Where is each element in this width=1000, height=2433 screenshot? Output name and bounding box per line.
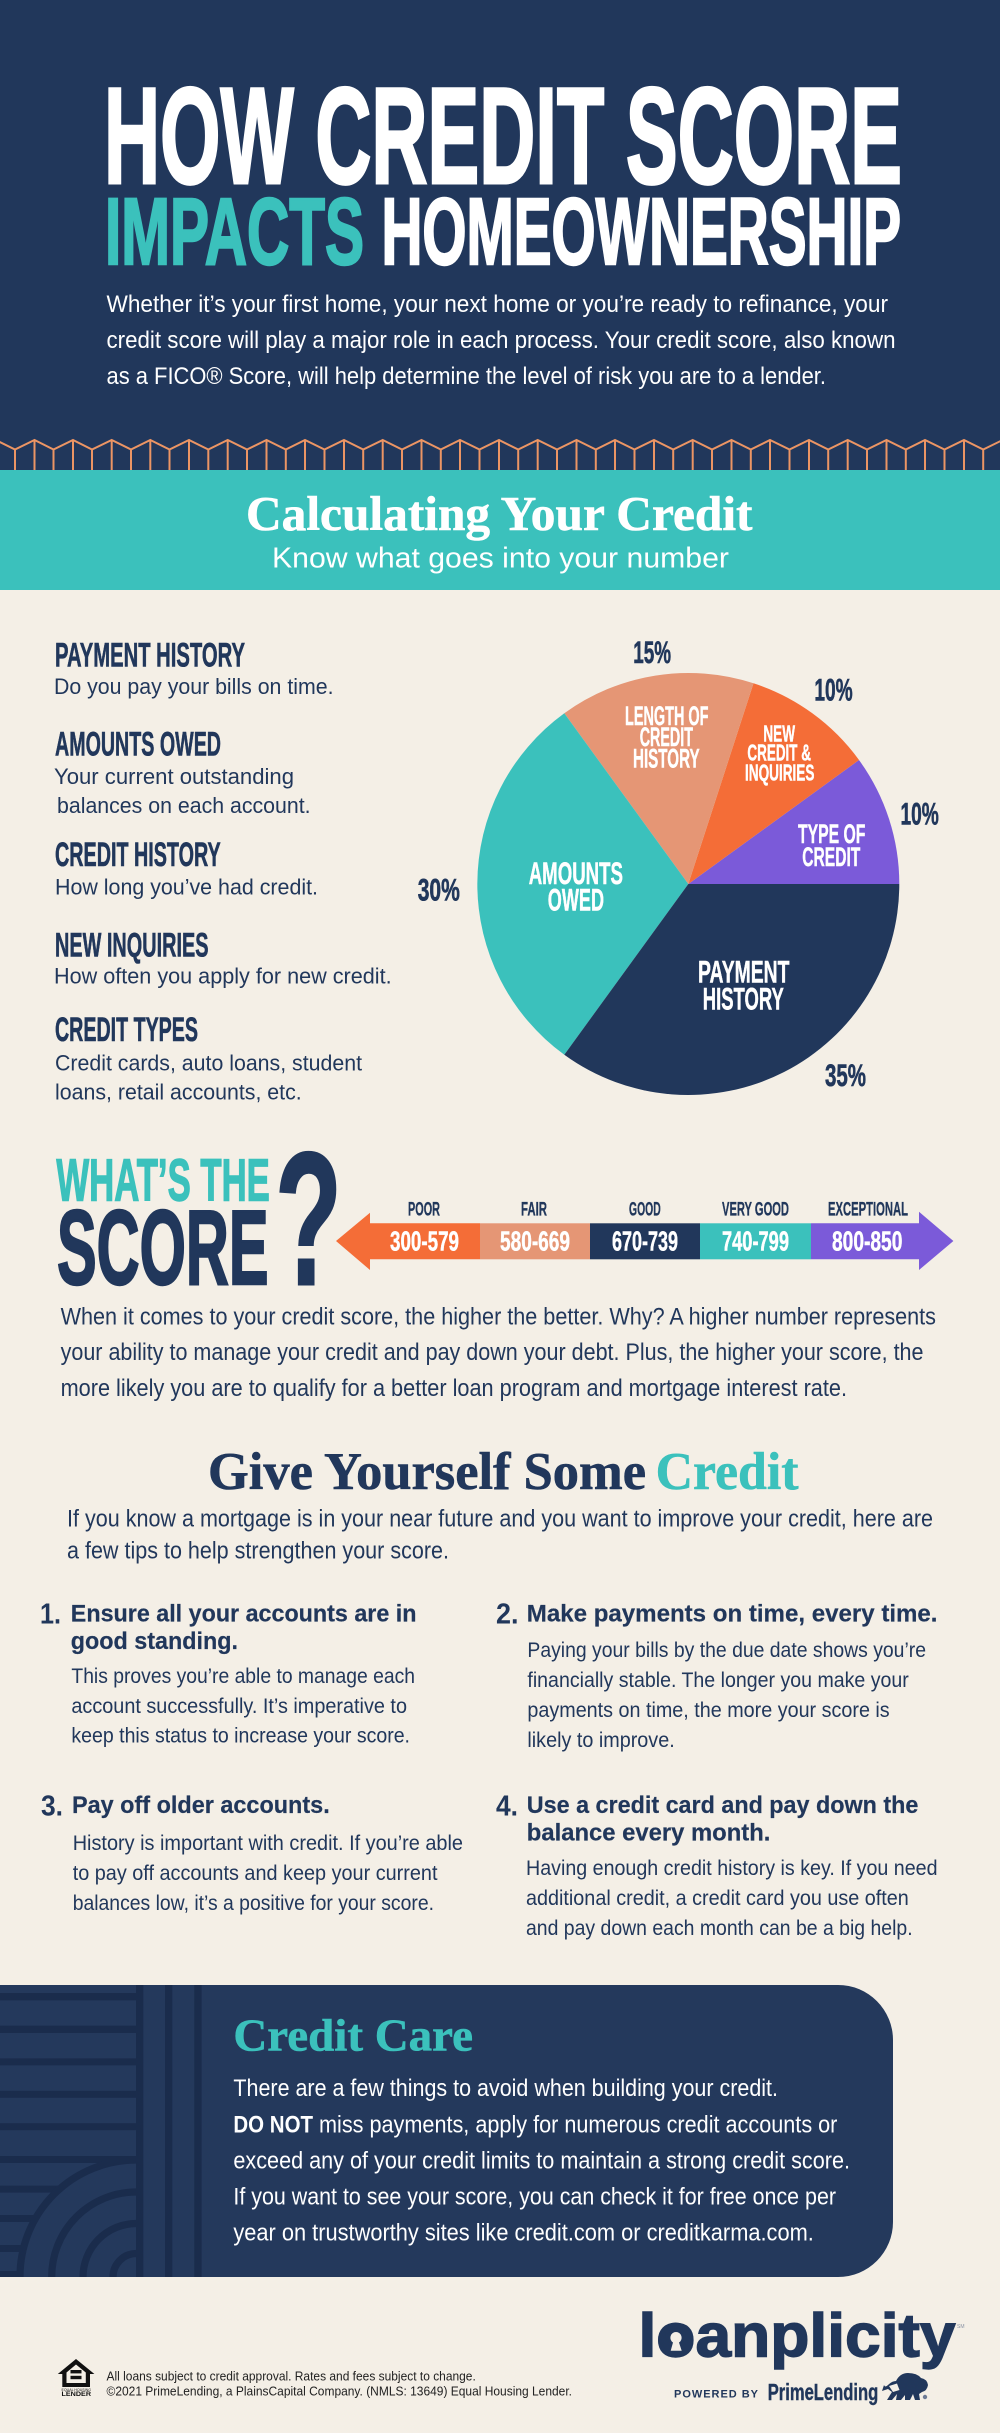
intro text: Whether it’s your first home, your next home or you’re ready to refinance, your — [106, 291, 888, 318]
logo: loanplicity powered by primelending: POWERED BY — [674, 2389, 759, 2401]
factor: credit types: loans, retail accounts, etc. — [55, 1080, 302, 1104]
pie labels: TYPE OF — [798, 819, 865, 849]
heading: what's the score — [56, 1114, 342, 1326]
factor: payment history: PAYMENT HISTORY — [55, 637, 245, 675]
tip 1: keep this status to increase your score. — [71, 1725, 410, 1748]
factor: credit types: Credit cards, auto loans, student — [55, 1051, 362, 1076]
tip 1: Ensure all your accounts are in — [71, 1600, 417, 1627]
logo: loanplicity powered by primelending: PrimeLending — [768, 2379, 878, 2405]
tip 4: 4. — [496, 1790, 518, 1822]
factor: credit types — [55, 1011, 362, 1104]
pie percentages — [418, 634, 939, 1093]
segment: poor — [336, 1200, 480, 1270]
credit care text: DO NOT — [233, 2111, 313, 2138]
tip 1: good standing. — [71, 1628, 238, 1655]
tip 3: Pay off older accounts. — [72, 1792, 330, 1819]
tip 2: financially stable. The longer you make your — [527, 1669, 909, 1692]
factor: amounts owed — [54, 725, 311, 818]
heading: give yourself some credit: Give Yourself Some — [208, 1443, 646, 1501]
segment: very good: 740-799 — [722, 1226, 789, 1257]
factor: amounts owed: balances on each account. — [57, 793, 311, 818]
pie labels: CREDIT — [640, 722, 693, 752]
tip 2: 2. — [496, 1598, 518, 1630]
icon: bison — [882, 2373, 928, 2400]
title — [104, 60, 902, 285]
slice: type of credit — [688, 760, 899, 884]
tip 3: History is important with credit. If you’re able — [73, 1832, 463, 1855]
pie percentages: 10% — [900, 796, 939, 832]
segment: exceptional: 800-850 — [832, 1226, 902, 1257]
pie labels: NEW — [763, 720, 795, 746]
tip 3: balances low, it’s a positive for your score. — [73, 1892, 434, 1915]
credit factors list — [54, 637, 392, 1104]
tip 3: 3. — [41, 1790, 63, 1822]
segment: fair: FAIR — [521, 1200, 547, 1221]
title: IMPACTS — [105, 179, 364, 285]
credit care text: If you want to see your score, you can check it for free once per — [233, 2183, 836, 2210]
tip 4: additional credit, a credit card you use often — [526, 1887, 909, 1910]
factor: new inquiries — [54, 926, 392, 989]
tip 1 — [40, 1598, 416, 1748]
pie labels: AMOUNTS — [529, 855, 623, 891]
logo: loanplicity powered by primelending: SM — [957, 2324, 964, 2330]
factor: credit history — [55, 836, 318, 900]
tip 2: Make payments on time, every time. — [527, 1600, 938, 1627]
segment: poor: POOR — [408, 1200, 440, 1221]
slice: length of credit history — [564, 673, 754, 884]
tip 2 — [496, 1598, 938, 1752]
segment: very good — [700, 1200, 811, 1259]
heading: what's the score: WHAT’S THE — [56, 1148, 270, 1214]
heading: what's the score: ? — [275, 1114, 342, 1326]
tip 2: likely to improve. — [527, 1729, 675, 1752]
panel: credit care — [0, 1985, 893, 2277]
tips intro text — [67, 1505, 933, 1564]
logo: loanplicity powered by primelending: loanplicity — [638, 2302, 956, 2370]
header panel — [0, 0, 1000, 470]
factor: payment history: Do you pay your bills on time. — [54, 674, 334, 699]
logo: loanplicity powered by primelending — [638, 2302, 964, 2405]
teal banner: calculating your credit — [0, 470, 1000, 590]
factor: amounts owed: Your current outstanding — [54, 764, 294, 789]
intro text — [106, 291, 896, 390]
icon: equal housing lender — [58, 2359, 94, 2398]
credit care text: There are a few things to avoid when building your credit. — [233, 2075, 778, 2102]
pie labels: CREDIT — [802, 842, 861, 872]
intro text: credit score will play a major role in each process. Your credit score, also known — [106, 327, 896, 354]
icon: equal housing lender: LENDER — [62, 2391, 91, 2398]
segment: fair: 580-669 — [500, 1226, 570, 1257]
segment: poor: 300-579 — [390, 1226, 459, 1257]
fence pattern of house roofs — [0, 440, 1000, 470]
credit care text — [233, 2075, 850, 2246]
tip 3 — [41, 1790, 463, 1915]
segment: exceptional: EXCEPTIONAL — [828, 1200, 908, 1221]
pie percentages: 10% — [814, 672, 853, 708]
score range arrow — [336, 1200, 953, 1270]
tip 4: Having enough credit history is key. If you need — [526, 1857, 938, 1880]
segment: exceptional — [811, 1200, 953, 1270]
slice: amounts owed — [477, 713, 688, 1055]
intro text: as a FICO® Score, will help determine the level of risk you are to a lender. — [106, 363, 826, 390]
tip 2: Paying your bills by the due date shows you’re — [527, 1639, 926, 1662]
slice: new credit and inquiries — [688, 683, 859, 884]
tip 1: This proves you’re able to manage each — [71, 1665, 415, 1688]
teal banner: calculating your credit: Know what goes into your number — [272, 542, 729, 574]
tips intro text: a few tips to help strengthen your score. — [67, 1538, 449, 1564]
segment: fair — [480, 1200, 590, 1259]
factor: payment history — [54, 637, 334, 699]
tip 2: payments on time, the more your score is — [527, 1699, 890, 1722]
tip 1: 1. — [40, 1598, 61, 1630]
pie labels: PAYMENT — [698, 954, 790, 990]
tip 4 — [496, 1790, 938, 1940]
icon: equal housing lender: EQUAL HOUSING — [62, 2388, 91, 2392]
credit care text: year on trustworthy sites like credit.com or creditkarma.com. — [233, 2219, 814, 2246]
factor: amounts owed: AMOUNTS OWED — [55, 725, 221, 763]
pie labels: CREDIT & — [747, 740, 811, 766]
segment: good — [590, 1200, 700, 1259]
factor: new inquiries: NEW INQUIRIES — [55, 926, 208, 964]
segment: good: GOOD — [629, 1200, 661, 1221]
segment: very good: VERY GOOD — [722, 1200, 789, 1221]
score explanation text: your ability to manage your credit and pay down your debt. Plus, the higher your score, the — [61, 1339, 924, 1366]
credit care text: exceed any of your credit limits to maintain a strong credit score. — [233, 2147, 850, 2174]
pie labels: INQUIRIES — [745, 759, 814, 785]
pie labels: OWED — [548, 881, 604, 917]
pie labels: HISTORY — [703, 980, 784, 1016]
teal banner: calculating your credit: Calculating Your Credit — [246, 486, 753, 541]
decorative line pattern — [0, 1985, 202, 2277]
pie labels — [529, 701, 865, 1016]
pie labels: HISTORY — [633, 743, 700, 773]
segment: good: 670-739 — [612, 1226, 678, 1257]
score explanation text — [61, 1303, 936, 1402]
icon: keyhole — [658, 2322, 693, 2358]
heading: what's the score: SCORE — [57, 1189, 268, 1307]
tip 4: balance every month. — [527, 1820, 770, 1847]
pie percentages: 35% — [825, 1057, 866, 1093]
legal disclaimer — [106, 2370, 572, 2398]
slice: payment history — [564, 884, 899, 1095]
factor: credit history: How long you’ve had credit. — [55, 875, 318, 900]
factor: new inquiries: How often you apply for new credit. — [54, 964, 392, 989]
tip 1: account successfully. It’s imperative to — [71, 1695, 407, 1718]
legal disclaimer: ©2021 PrimeLending, a PlainsCapital Company. (NMLS: 13649) Equal Housing Lender. — [106, 2384, 572, 2398]
heading: give yourself some credit: Credit — [656, 1443, 799, 1501]
pie labels: LENGTH OF — [625, 701, 708, 731]
tip 3: to pay off accounts and keep your current — [73, 1862, 438, 1885]
pie percentages: 30% — [418, 872, 460, 908]
credit care text: miss payments, apply for numerous credit accounts or — [319, 2111, 837, 2138]
tip 4: Use a credit card and pay down the — [527, 1792, 918, 1819]
score explanation text: more likely you are to qualify for a better loan program and mortgage interest rate. — [61, 1375, 847, 1402]
credit care heading: Credit Care — [233, 2010, 473, 2061]
factor: credit history: CREDIT HISTORY — [55, 836, 221, 874]
pie percentages: 15% — [633, 634, 671, 670]
tip 4: and pay down each month can be a big help. — [526, 1917, 913, 1940]
legal disclaimer: All loans subject to credit approval. Rates and fees subject to change. — [106, 2370, 476, 2384]
factor: credit types: CREDIT TYPES — [55, 1011, 198, 1049]
pie chart — [418, 634, 939, 1095]
